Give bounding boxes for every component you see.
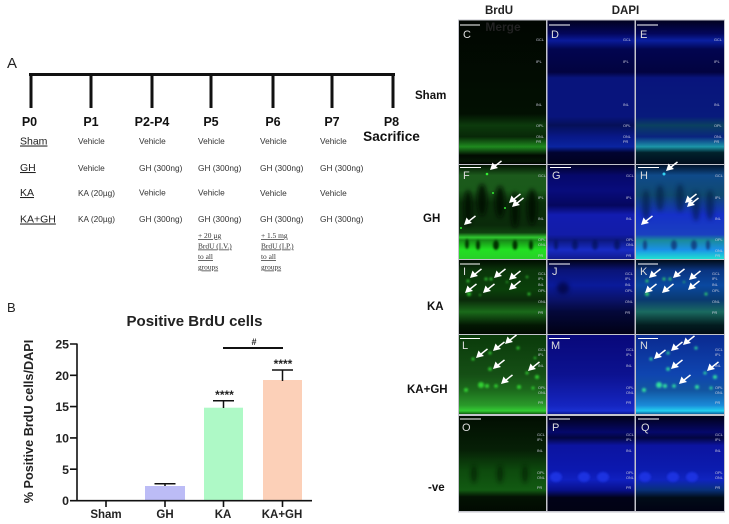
x axis category labels: Sham: [90, 509, 122, 521]
panel F: PR: [538, 254, 544, 258]
panel E: ONL: [714, 135, 722, 139]
panel D: PR: [623, 140, 629, 144]
treatment schedule table: [78, 136, 364, 224]
panel G: PR: [626, 254, 632, 258]
panel J: INL: [625, 283, 631, 287]
panel L: L: [462, 340, 468, 352]
panel O: [459, 416, 546, 511]
BrdU I.V. note: to all: [198, 252, 213, 261]
panel G: ONL: [626, 243, 634, 247]
timepoint labels: P6: [265, 115, 281, 129]
panel C: IPL: [536, 60, 542, 64]
panel G: INL: [626, 217, 632, 221]
panel H: [636, 161, 724, 259]
treatment schedule table: Vehicle: [198, 188, 225, 198]
panel I: [459, 260, 546, 334]
panel N: ONL: [715, 391, 723, 395]
treatment schedule table: GH (300ng): [139, 214, 183, 224]
panel E: GCL: [714, 38, 722, 42]
treatment schedule table: Vehicle: [78, 163, 105, 173]
panel D: IPL: [623, 60, 629, 64]
panel K: INL: [712, 283, 718, 287]
panel L: GCL: [538, 348, 546, 352]
panel G: G: [552, 170, 561, 182]
panel N: IPL: [715, 353, 721, 357]
panel G: OPL: [626, 238, 634, 242]
panel P: ONL: [626, 476, 634, 480]
panel J: IPL: [625, 277, 631, 281]
treatment schedule table: Vehicle: [198, 136, 225, 146]
panel G: IPL: [626, 196, 632, 200]
panel L: IPL: [538, 353, 544, 357]
row: GH panels F G H: [459, 160, 724, 259]
y axis tick labels: [55, 338, 69, 508]
panel I: IPL: [538, 277, 544, 281]
treatment schedule table: Vehicle: [139, 136, 166, 146]
panel letter A: A: [7, 55, 17, 72]
panel O: IPL: [537, 438, 543, 442]
panel H: OPL: [715, 238, 723, 242]
panel P: OPL: [626, 471, 634, 475]
panel E: INL: [714, 103, 720, 107]
panel O: INL: [537, 449, 543, 453]
panel M: PR: [626, 401, 632, 405]
panel letter B: B: [7, 300, 16, 315]
panel A: treatment timeline: [7, 55, 420, 272]
panel C: GCL: [536, 38, 544, 42]
panel H: INL: [715, 217, 721, 221]
panel H: IPL: [715, 196, 721, 200]
panel O: O: [462, 422, 471, 434]
treatment schedule table: GH (300ng): [260, 163, 304, 173]
panel Q: OPL: [715, 471, 723, 475]
panel F: GCL: [538, 174, 546, 178]
panel J: [548, 260, 634, 334]
panel J: J: [552, 266, 558, 278]
panel J: ONL: [625, 300, 633, 304]
panel E: [636, 20, 724, 164]
BrdU I.P. note: + 1.5 mg: [261, 231, 288, 240]
panel I: OPL: [538, 289, 546, 293]
panel G: [548, 165, 634, 259]
treatment schedule table: Vehicle: [320, 136, 347, 146]
significance bracket: ****: [215, 388, 234, 402]
panel I: I: [463, 266, 466, 278]
chart title: Positive BrdU cells: [127, 313, 262, 330]
panel O: GCL: [537, 433, 545, 437]
panel D: D: [551, 29, 559, 41]
BrdU I.P. note: to all: [261, 252, 276, 261]
y axis tick labels: 25: [55, 338, 69, 352]
panel O: PR: [537, 486, 543, 490]
y axis title: % Positive BrdU cells/DAPI: [22, 340, 36, 503]
panel I: GCL: [538, 272, 546, 276]
panel L: INL: [538, 364, 544, 368]
panel B: bar chart of positive BrdU cells: [7, 300, 312, 521]
panel K: IPL: [712, 277, 718, 281]
panel N: INL: [715, 364, 721, 368]
panel Q: GCL: [715, 433, 723, 437]
panel F: F: [463, 170, 470, 182]
treatment schedule table: Vehicle: [139, 188, 166, 198]
treatment schedule table: KA (20µg): [78, 188, 115, 198]
timepoint labels: P0: [22, 115, 37, 129]
panel P: INL: [626, 449, 632, 453]
panel K: OPL: [712, 289, 720, 293]
y axis tick labels: 0: [62, 494, 69, 508]
panel Q: [636, 416, 724, 511]
panel F: [459, 160, 546, 259]
row labels: Sham: [415, 90, 446, 102]
panel C: INL: [536, 103, 542, 107]
significance bracket: ****: [274, 357, 293, 371]
panel I: INL: [538, 283, 544, 287]
row labels: GH: [423, 213, 440, 225]
error bars: [154, 370, 293, 486]
panel H: GCL: [715, 174, 723, 178]
panel M: OPL: [626, 386, 634, 390]
panel N: [636, 335, 724, 414]
panel O: ONL: [537, 476, 545, 480]
row labels: KA+GH: [407, 384, 448, 396]
panel L: [459, 334, 546, 414]
panel Q: IPL: [715, 438, 721, 442]
significance bracket: [215, 337, 293, 402]
panel D: [548, 20, 634, 164]
panel I: PR: [538, 311, 544, 315]
axes: [70, 344, 312, 507]
x axis category labels: KA: [215, 509, 231, 521]
BrdU I.V. note: groups: [198, 262, 218, 272]
panel H: ONL: [715, 249, 723, 253]
panel K: ONL: [712, 300, 720, 304]
timepoint labels: P1: [83, 115, 99, 129]
panel N: GCL: [715, 348, 723, 352]
timeline bar with ticks: [29, 74, 395, 108]
panel E: E: [640, 29, 647, 41]
treatment schedule table: Vehicle: [260, 188, 287, 198]
significance bracket: #: [251, 337, 257, 347]
treatment schedule table: KA (20µg): [78, 214, 115, 224]
panel E: OPL: [714, 124, 722, 128]
y axis tick labels: 10: [55, 432, 69, 446]
panel K: PR: [712, 311, 718, 315]
BrdU I.V. note: + 20 µg: [198, 231, 222, 240]
group names: Sham: [20, 136, 48, 148]
panel P: [548, 416, 634, 511]
column headings: [485, 5, 639, 17]
panel E: IPL: [714, 60, 720, 64]
panel F: OPL: [538, 238, 546, 242]
row labels: KA: [427, 301, 444, 313]
x axis category labels: [90, 509, 302, 521]
panel L: PR: [538, 401, 544, 405]
panel P: GCL: [626, 433, 634, 437]
panel Q: ONL: [715, 476, 723, 480]
panel D: INL: [623, 103, 629, 107]
timepoint labels: Sacrifice: [363, 129, 420, 144]
panel C: ONL: [536, 135, 544, 139]
panel N: OPL: [715, 386, 723, 390]
panel L: OPL: [538, 386, 546, 390]
row: negative control panels O P Q: [459, 416, 724, 511]
group names: GH: [20, 162, 36, 174]
treatment schedule table: Vehicle: [260, 136, 287, 146]
panel K: GCL: [712, 272, 720, 276]
panel H: PR: [715, 254, 721, 258]
panel N: PR: [715, 401, 721, 405]
panel M: [548, 335, 634, 414]
row labels: -ve: [428, 482, 445, 494]
group names: [20, 136, 56, 226]
treatment schedule table: GH (300ng): [139, 163, 183, 173]
panel M: M: [551, 340, 560, 352]
panel P: P: [552, 422, 559, 434]
timepoint labels: P2-P4: [135, 115, 169, 129]
bars: [145, 380, 302, 500]
treatment schedule table: GH (300ng): [260, 214, 304, 224]
panel C: OPL: [536, 124, 544, 128]
BrdU I.P. note: BrdU (I.P.): [261, 242, 294, 250]
panel N: N: [640, 340, 648, 352]
panel C: C: [463, 29, 471, 41]
panel K: [636, 260, 724, 334]
panel M: IPL: [626, 353, 632, 357]
column headings: DAPI: [612, 5, 639, 17]
x axis category labels: GH: [156, 509, 174, 521]
timepoint labels: [22, 115, 420, 144]
panel F: INL: [538, 217, 544, 221]
group names: KA+GH: [20, 214, 56, 226]
panel C: PR: [536, 140, 542, 144]
row: KA+GH panels L M N: [459, 334, 724, 414]
panel J: PR: [625, 311, 631, 315]
panel P: IPL: [626, 438, 632, 442]
treatment schedule table: Vehicle: [320, 188, 347, 198]
y axis tick labels: 15: [55, 400, 69, 414]
panel D: ONL: [623, 135, 631, 139]
treatment schedule table: GH (300ng): [198, 163, 242, 173]
panel F: ONL: [538, 243, 546, 247]
panel D: GCL: [623, 38, 631, 42]
column headings: BrdU: [485, 5, 513, 17]
panel H: H: [640, 170, 648, 182]
row: Sham panels C D E: [459, 20, 724, 164]
panel C: [459, 20, 546, 164]
microscopy grid backing: [458, 20, 725, 512]
group names: KA: [20, 187, 34, 199]
treatment schedule table: GH (300ng): [198, 214, 242, 224]
panel D: OPL: [623, 124, 631, 128]
panel L: ONL: [538, 391, 546, 395]
panel K: K: [640, 266, 648, 278]
panel M: INL: [626, 364, 632, 368]
y axis tick labels: 20: [55, 369, 69, 383]
x axis category labels: KA+GH: [262, 509, 302, 521]
panel E: PR: [714, 140, 720, 144]
timepoint labels: P7: [324, 115, 340, 129]
treatment schedule table: Vehicle: [78, 136, 105, 146]
timepoint labels: P8: [384, 115, 399, 129]
panel I: ONL: [538, 300, 546, 304]
panel Q: Q: [641, 422, 650, 434]
panel F: IPL: [538, 196, 544, 200]
panel Q: INL: [715, 449, 721, 453]
panel P: PR: [626, 486, 632, 490]
treatment schedule table: GH (300ng): [320, 214, 364, 224]
BrdU I.V. note: BrdU (I.V.): [198, 242, 232, 250]
panel J: OPL: [625, 289, 633, 293]
panel M: ONL: [626, 391, 634, 395]
treatment schedule table: GH (300ng): [320, 163, 364, 173]
panel C: Merge: [485, 20, 521, 34]
row labels: [407, 90, 448, 494]
panel G: GCL: [626, 174, 634, 178]
timepoint labels: P5: [203, 115, 219, 129]
row: KA panels I J K: [459, 260, 724, 334]
panel Q: PR: [715, 486, 721, 490]
panel M: GCL: [626, 348, 634, 352]
BrdU I.P. note: groups: [261, 262, 281, 272]
panel J: GCL: [625, 272, 633, 276]
panel O: OPL: [537, 471, 545, 475]
y axis tick labels: 5: [62, 463, 69, 477]
